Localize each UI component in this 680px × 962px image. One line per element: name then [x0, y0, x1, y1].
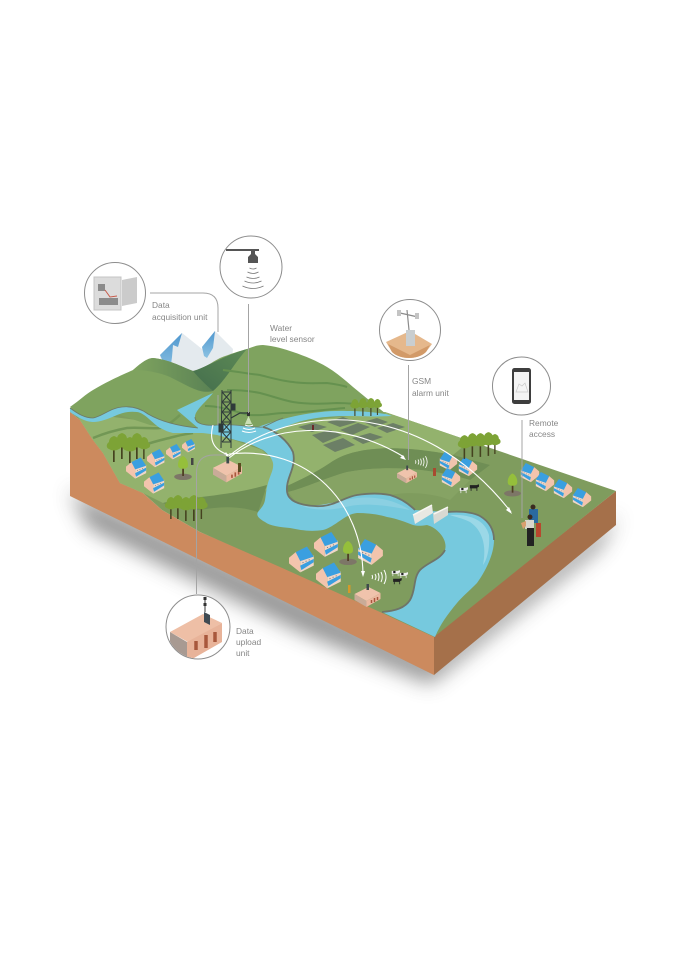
- label: water level sensor: level sensor: [270, 334, 315, 344]
- right row of houses: [521, 463, 591, 507]
- main data building: [213, 457, 242, 482]
- left meadow: [74, 412, 275, 503]
- label: data acquisition unit: acquisition unit: [152, 312, 208, 322]
- label: GSM alarm unit: alarm unit: [412, 388, 449, 398]
- label: water level sensor: Water: [270, 323, 292, 333]
- wireless arcs: [212, 420, 511, 574]
- dam: [413, 505, 448, 524]
- river: [70, 393, 494, 637]
- GSM building: [397, 466, 417, 483]
- label: remote access: access: [529, 429, 555, 439]
- small trees on platforms: [174, 456, 521, 565]
- island houses: [289, 532, 383, 588]
- right light field: [265, 412, 470, 486]
- label: data acquisition unit: Data: [152, 300, 170, 310]
- label: data upload unit: upload: [236, 637, 261, 647]
- block shadow: [70, 490, 618, 684]
- dark hill ridge: [133, 358, 213, 392]
- label: GSM alarm unit: GSM: [412, 376, 431, 386]
- callout: remote access: [492, 357, 550, 415]
- tree cluster front: [165, 495, 208, 521]
- callout: water level sensor: [220, 236, 282, 298]
- left village houses: [126, 439, 195, 494]
- callout: GSM alarm unit: [380, 300, 440, 360]
- label: remote access: Remote: [529, 418, 558, 428]
- hill contour lines: [205, 370, 368, 415]
- left dark band: [163, 485, 267, 512]
- right mid band: [288, 468, 470, 506]
- arrowheads: [224, 452, 512, 577]
- right dark band: [287, 448, 490, 492]
- callout: data acquisition unit: [84, 262, 146, 324]
- communication tower: [219, 390, 249, 448]
- light water: [450, 515, 489, 565]
- connector lines: [150, 293, 522, 594]
- villagers: [191, 425, 436, 593]
- mountains: [160, 331, 233, 385]
- GSM village houses: [440, 452, 477, 487]
- tree cluster back: [350, 398, 382, 416]
- sensor beam: [242, 412, 256, 432]
- terrain block: [70, 236, 616, 675]
- back hills: [70, 345, 386, 432]
- label: data upload unit: Data: [236, 626, 254, 636]
- label: data upload unit: unit: [236, 648, 250, 658]
- people: [521, 504, 541, 546]
- upper bank lines: [70, 407, 283, 428]
- signal waves: [372, 456, 427, 584]
- island building: [354, 584, 380, 607]
- ground surface: [70, 408, 616, 637]
- cows: [392, 484, 479, 584]
- land contour lines: [93, 415, 193, 447]
- tree cluster left: [107, 433, 150, 463]
- upper tributary: [258, 411, 392, 432]
- callout: data upload unit: [166, 595, 230, 662]
- left soil face: [70, 412, 434, 675]
- tree cluster right: [458, 432, 501, 459]
- right soil face: [434, 491, 616, 675]
- river bank strokes: [263, 427, 494, 612]
- field plots: [298, 417, 405, 452]
